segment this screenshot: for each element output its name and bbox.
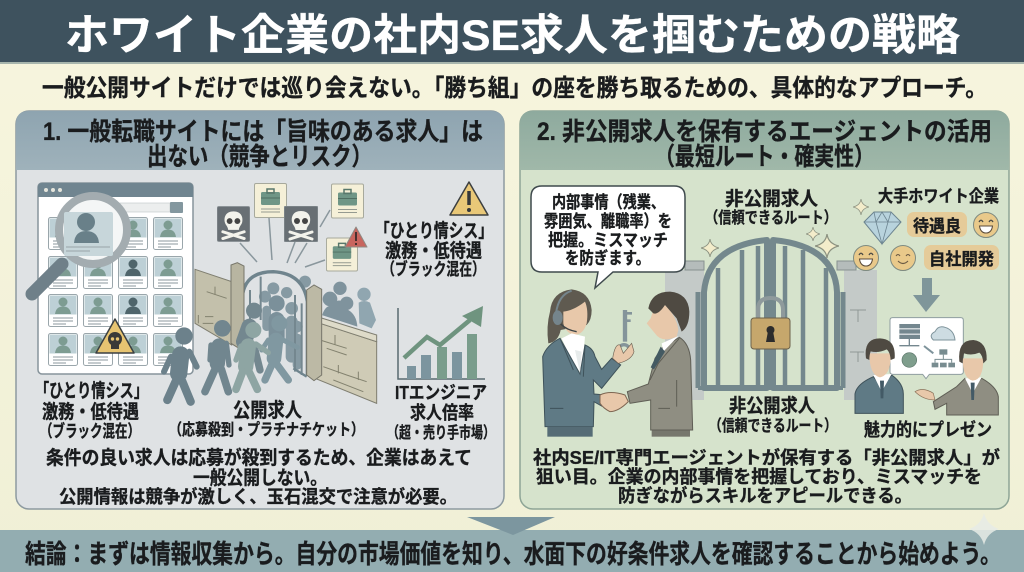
callout: agent speech bubble: 雰囲気、離職率）を (544, 212, 672, 231)
label: private jobs top (705, 187, 837, 227)
label: IT engineer ratio: 求人倍率 (410, 402, 474, 423)
left pillar (231, 263, 244, 347)
body text left (46, 446, 472, 507)
label: private jobs top: 非公開求人 (725, 187, 818, 210)
badge: in-house development: 自社開発 (929, 249, 994, 269)
conclusion bar (0, 513, 1024, 572)
label: private jobs bottom: （信頼できるルート） (709, 416, 837, 435)
illustration: agent handshake (543, 289, 693, 437)
label: solo IT admin left (35, 380, 148, 441)
panel background right (520, 111, 1009, 509)
figure: presenter right (915, 340, 998, 415)
label: solo IT admin right: 「ひとり情シス」 (375, 220, 493, 242)
board (890, 318, 963, 379)
label: private jobs bottom: 非公開求人 (729, 394, 815, 417)
arrow: down to conclusion (467, 517, 555, 535)
icon: key (613, 310, 634, 363)
label: public jobs (169, 399, 364, 439)
right pillar (307, 285, 322, 381)
label: public jobs: 公開求人 (233, 399, 302, 422)
block: major white companies (853, 186, 999, 312)
label: IT engineer ratio (387, 383, 495, 442)
left wall (195, 269, 232, 345)
illustration: job site browser with magnifier (32, 183, 193, 374)
panel heading right: （最短ルート・確実性） (655, 143, 874, 171)
label: private jobs top: （信頼できるルート） (705, 208, 837, 227)
callout: agent speech bubble: を防ぎます。 (565, 248, 650, 268)
panel: private job agents (520, 111, 1009, 509)
body text left: 公開情報は競争が激しく、玉石混交で注意が必要。 (59, 486, 457, 507)
badge: good conditions (907, 212, 967, 237)
title banner (0, 0, 1024, 64)
icon: handshake (600, 392, 628, 412)
label: private jobs bottom (709, 394, 837, 435)
icon: skull warning (96, 319, 134, 353)
panel background left (16, 111, 504, 509)
icon: padlock (751, 298, 790, 349)
person light (236, 322, 268, 389)
person mid back (244, 295, 285, 370)
crowd behind gate (259, 276, 311, 365)
badge: good conditions: 待遇良 (913, 217, 961, 236)
label: IT engineer ratio: （超・売り手市場） (387, 423, 495, 442)
person second (205, 320, 231, 392)
icon: warning triangle (450, 182, 488, 215)
block: major white companies: 大手ホワイト企業 (878, 186, 999, 206)
figure: agent (543, 289, 621, 437)
body text right: 狙い目。企業の内部事情を把握しており、ミスマッチを (536, 467, 982, 487)
illustration: locked gate (665, 227, 877, 400)
figure: candidate (627, 292, 693, 437)
body text right: 防ぎながらスキルをアピールできる。 (618, 485, 912, 506)
person entering (262, 315, 297, 380)
callout: agent speech bubble: 把握。ミスマッチ (548, 231, 668, 250)
body text left: 条件の良い求人は応募が殺到するため、企業はあえて (46, 446, 472, 469)
icon: magnifying glass (32, 196, 127, 294)
label: solo IT admin left: 「ひとり情シス」 (35, 380, 148, 402)
label: solo IT admin right: （ブラック混在） (382, 259, 485, 279)
label: public jobs: （応募殺到・プラチナチケット） (169, 420, 364, 439)
label: solo IT admin right (375, 220, 493, 279)
label: solo IT admin right: 激務・低待遇 (385, 240, 482, 262)
body text left: 一般公開しない。 (193, 467, 327, 489)
bar chart: IT engineer job ratio (398, 306, 485, 379)
body text right: 社内SE/IT専門エージェントが保有する「非公開求人」が (533, 447, 1000, 468)
label: IT engineer ratio: ITエンジニア (395, 383, 487, 403)
label: present attractively: 魅力的にプレゼン (864, 419, 992, 440)
panel heading right (520, 111, 1009, 171)
callout: agent speech bubble (531, 186, 685, 288)
illustration: scattered job postings (217, 184, 367, 271)
figure: presenter left (855, 338, 903, 413)
right wall (315, 322, 377, 403)
person front (164, 327, 197, 402)
panel heading left: 1. 一般転職サイトには「旨味のある求人」は (43, 118, 483, 146)
icon: diamond (864, 212, 901, 244)
title banner: ホワイト企業の社内SE求人を掴むための戦略 (65, 12, 960, 60)
arrow: down (913, 278, 940, 312)
panel heading left (16, 111, 504, 171)
label: solo IT admin left: 激務・低待遇 (42, 401, 139, 423)
body text right (533, 447, 1000, 506)
gate (242, 272, 307, 375)
label: solo IT admin left: （ブラック混在） (40, 421, 140, 441)
callout: agent speech bubble: 内部事情（残業、 (552, 192, 665, 212)
badge: in-house development (924, 245, 999, 270)
panel heading left: 出ない（競争とリスク） (147, 143, 372, 171)
crowd right of wall (322, 282, 357, 327)
panel: general job sites (16, 111, 504, 509)
illustration: presentation (855, 318, 998, 415)
illustration: crowded gate (164, 263, 377, 403)
